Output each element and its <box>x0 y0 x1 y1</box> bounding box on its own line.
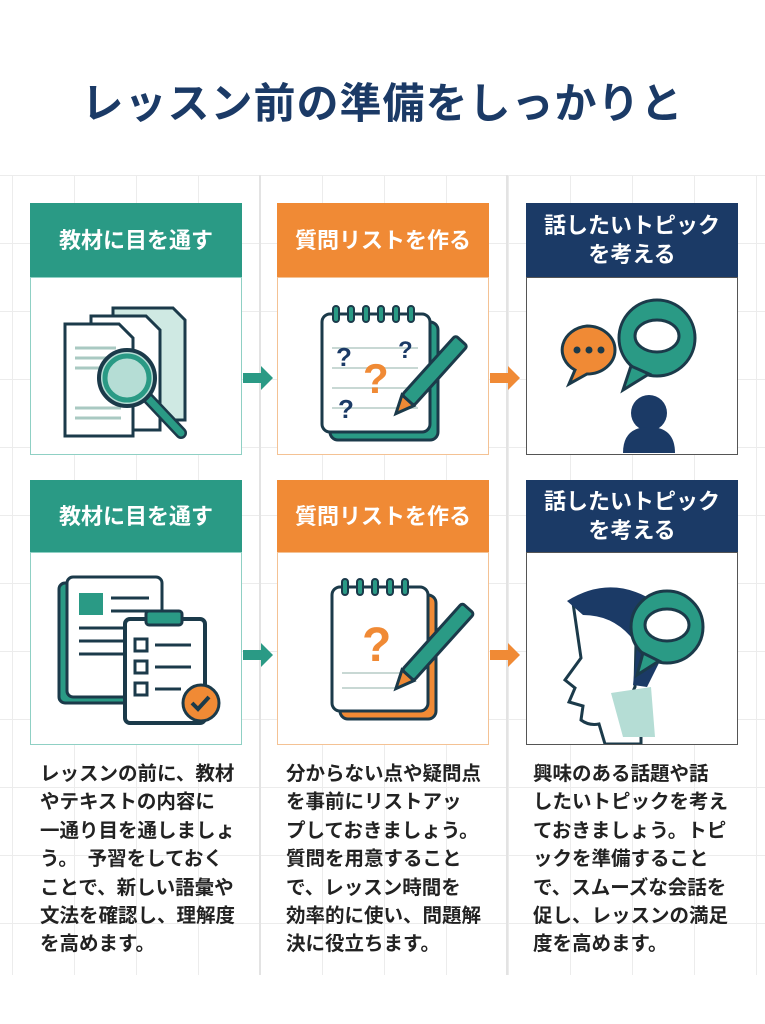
icon: head with brain bubble <box>526 552 738 745</box>
text block: col3: 促し、レッスンの満足 <box>533 905 728 927</box>
text block: col1: う。 予習をしておく <box>40 848 223 870</box>
text block: col1: ことで、新しい語彙や <box>40 877 234 899</box>
title: レッスン前の準備をしっかりと <box>81 80 684 127</box>
panel: col1 row1 <box>30 203 242 455</box>
icon: notepad with question marks: ? <box>336 342 352 372</box>
text block: col2 <box>286 763 481 955</box>
arrow: orange 1 <box>490 366 520 390</box>
text block: col2: プしておきましょう。 <box>286 820 479 842</box>
text block: col3: で、スムーズな会話を <box>533 877 726 899</box>
icon: notepad with pen <box>277 552 489 745</box>
text block: col1: 一通り目を通しましょ <box>40 820 235 842</box>
header: 話したいトピックを考える 2: 話したいトピック <box>544 489 720 514</box>
text block: col3: 度を高めます。 <box>533 933 668 955</box>
icon: documents with magnifier <box>30 277 242 455</box>
panel: col2 row1 <box>277 203 489 455</box>
panel: col2 row2 <box>277 480 489 745</box>
text block: col3: したいトピックを考え <box>533 791 728 813</box>
text block: col3: ておきましょう。トピ <box>533 820 726 842</box>
text block: col3: ックを準備すること <box>533 848 709 870</box>
header: 話したいトピックを考える: 話したいトピック <box>544 213 720 238</box>
icon: notepad with question marks: ? <box>398 337 413 364</box>
header: 教材に目を通す 2: 教材に目を通す <box>59 504 213 528</box>
text block: col3 <box>533 763 728 955</box>
text block: col2: 効率的に使い、問題解 <box>286 905 481 927</box>
header: 質問リストを作る 2 <box>277 480 489 552</box>
text block: col1: 文法を確認し、理解度 <box>40 905 235 927</box>
text block: col1 <box>40 763 235 955</box>
arrow: orange 2 <box>490 643 520 667</box>
icon: notepad with question marks <box>277 277 489 455</box>
text block: col2: を事前にリストアッ <box>286 791 462 813</box>
header: 話したいトピックを考える 2 <box>526 480 738 552</box>
panel: col3 row2 <box>526 480 738 745</box>
header: 質問リストを作る: 質問リストを作る <box>295 228 471 252</box>
text block: col3: 興味のある話題や話 <box>533 763 709 785</box>
text block: col1: レッスンの前に、教材 <box>40 763 234 785</box>
panel: col1 row2 <box>30 480 242 745</box>
text block: col1: を高めます。 <box>40 933 155 955</box>
icon: notepad with question marks: ? <box>338 394 354 424</box>
text block: col2: で、レッスン時間を <box>286 877 461 899</box>
text block: col2: 決に役立ちます。 <box>286 933 440 955</box>
header: 教材に目を通す: 教材に目を通す <box>59 228 213 252</box>
text block: col1: やテキストの内容に <box>40 791 215 813</box>
header: 話したいトピックを考える 2: を考える <box>588 518 676 543</box>
header: 話したいトピックを考える: を考える <box>588 242 676 267</box>
header: 話したいトピックを考える <box>526 203 738 277</box>
icon: notepad with question marks: ? <box>363 355 389 402</box>
icon: speech bubbles and person <box>526 277 738 455</box>
icon: document and checklist <box>30 552 242 745</box>
arrow: teal 2 <box>243 643 273 667</box>
header: 質問リストを作る 2: 質問リストを作る <box>295 504 471 528</box>
panel: col3 row1 <box>526 203 738 455</box>
arrow: teal 1 <box>243 366 273 390</box>
icon: notepad with pen: ? <box>362 619 391 672</box>
text block: col2: 分からない点や疑問点 <box>286 763 481 785</box>
header: 教材に目を通す 2 <box>30 480 242 552</box>
header: 教材に目を通す <box>30 203 242 277</box>
text block: col2: 質問を用意すること <box>286 848 462 870</box>
header: 質問リストを作る <box>277 203 489 277</box>
